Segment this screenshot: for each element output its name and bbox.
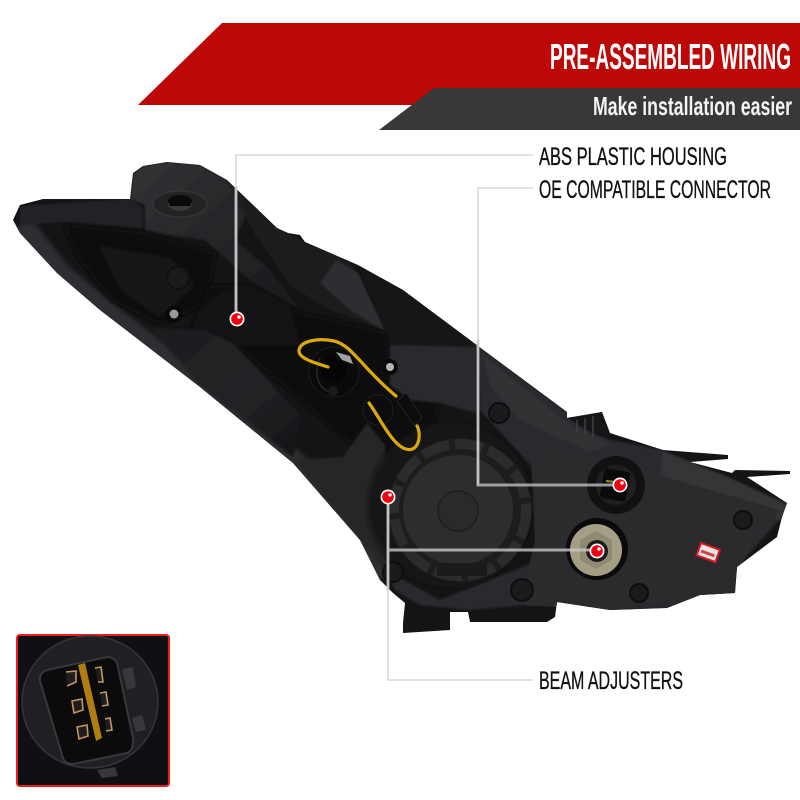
left recess bbox=[63, 224, 217, 325]
headlight housing bbox=[13, 162, 790, 633]
wire connector bbox=[397, 393, 422, 425]
orange strip bbox=[78, 663, 102, 741]
connector collar bbox=[22, 636, 158, 768]
leader line: ABS plastic housing bbox=[236, 155, 533, 319]
rear cap bbox=[368, 423, 532, 587]
yellow wiring bbox=[299, 340, 419, 450]
connector body bbox=[40, 657, 133, 764]
marker: housing bbox=[230, 312, 244, 326]
beam adjuster bbox=[566, 518, 628, 580]
knob bbox=[167, 267, 189, 289]
warning sticker bbox=[697, 543, 720, 562]
connector socket bbox=[587, 456, 645, 514]
centre dark bbox=[190, 284, 440, 447]
vent bbox=[567, 412, 610, 440]
connector latches bbox=[122, 667, 146, 732]
left lip bbox=[20, 199, 143, 228]
mounting hole bbox=[153, 191, 207, 217]
right lower fill bbox=[522, 466, 780, 610]
right panel bbox=[375, 340, 787, 610]
lower light facet bbox=[293, 423, 388, 570]
red banner bbox=[138, 23, 800, 105]
bolts bbox=[383, 403, 752, 602]
bulb socket bbox=[309, 347, 359, 397]
lamp dome bbox=[260, 290, 290, 306]
inset: connector close-up bbox=[17, 635, 169, 786]
marker: adjuster left bbox=[380, 490, 396, 504]
marker: connector bbox=[612, 478, 628, 492]
label: beam adjusters: BEAM ADJUSTERS bbox=[539, 667, 683, 695]
pins bbox=[66, 667, 112, 739]
screws bbox=[166, 306, 398, 375]
lower bevel panel bbox=[150, 328, 302, 457]
upper lobe bbox=[130, 162, 300, 310]
leader line: OE compatible connector bbox=[478, 188, 620, 485]
second socket bbox=[363, 395, 393, 425]
patch by screw bbox=[390, 345, 477, 413]
upper facet bbox=[320, 260, 386, 332]
leader line: beam adjusters bbox=[388, 497, 597, 680]
outer rim bbox=[20, 225, 380, 580]
dark sub-banner bbox=[379, 88, 800, 130]
marker: adjuster right bbox=[590, 544, 604, 558]
